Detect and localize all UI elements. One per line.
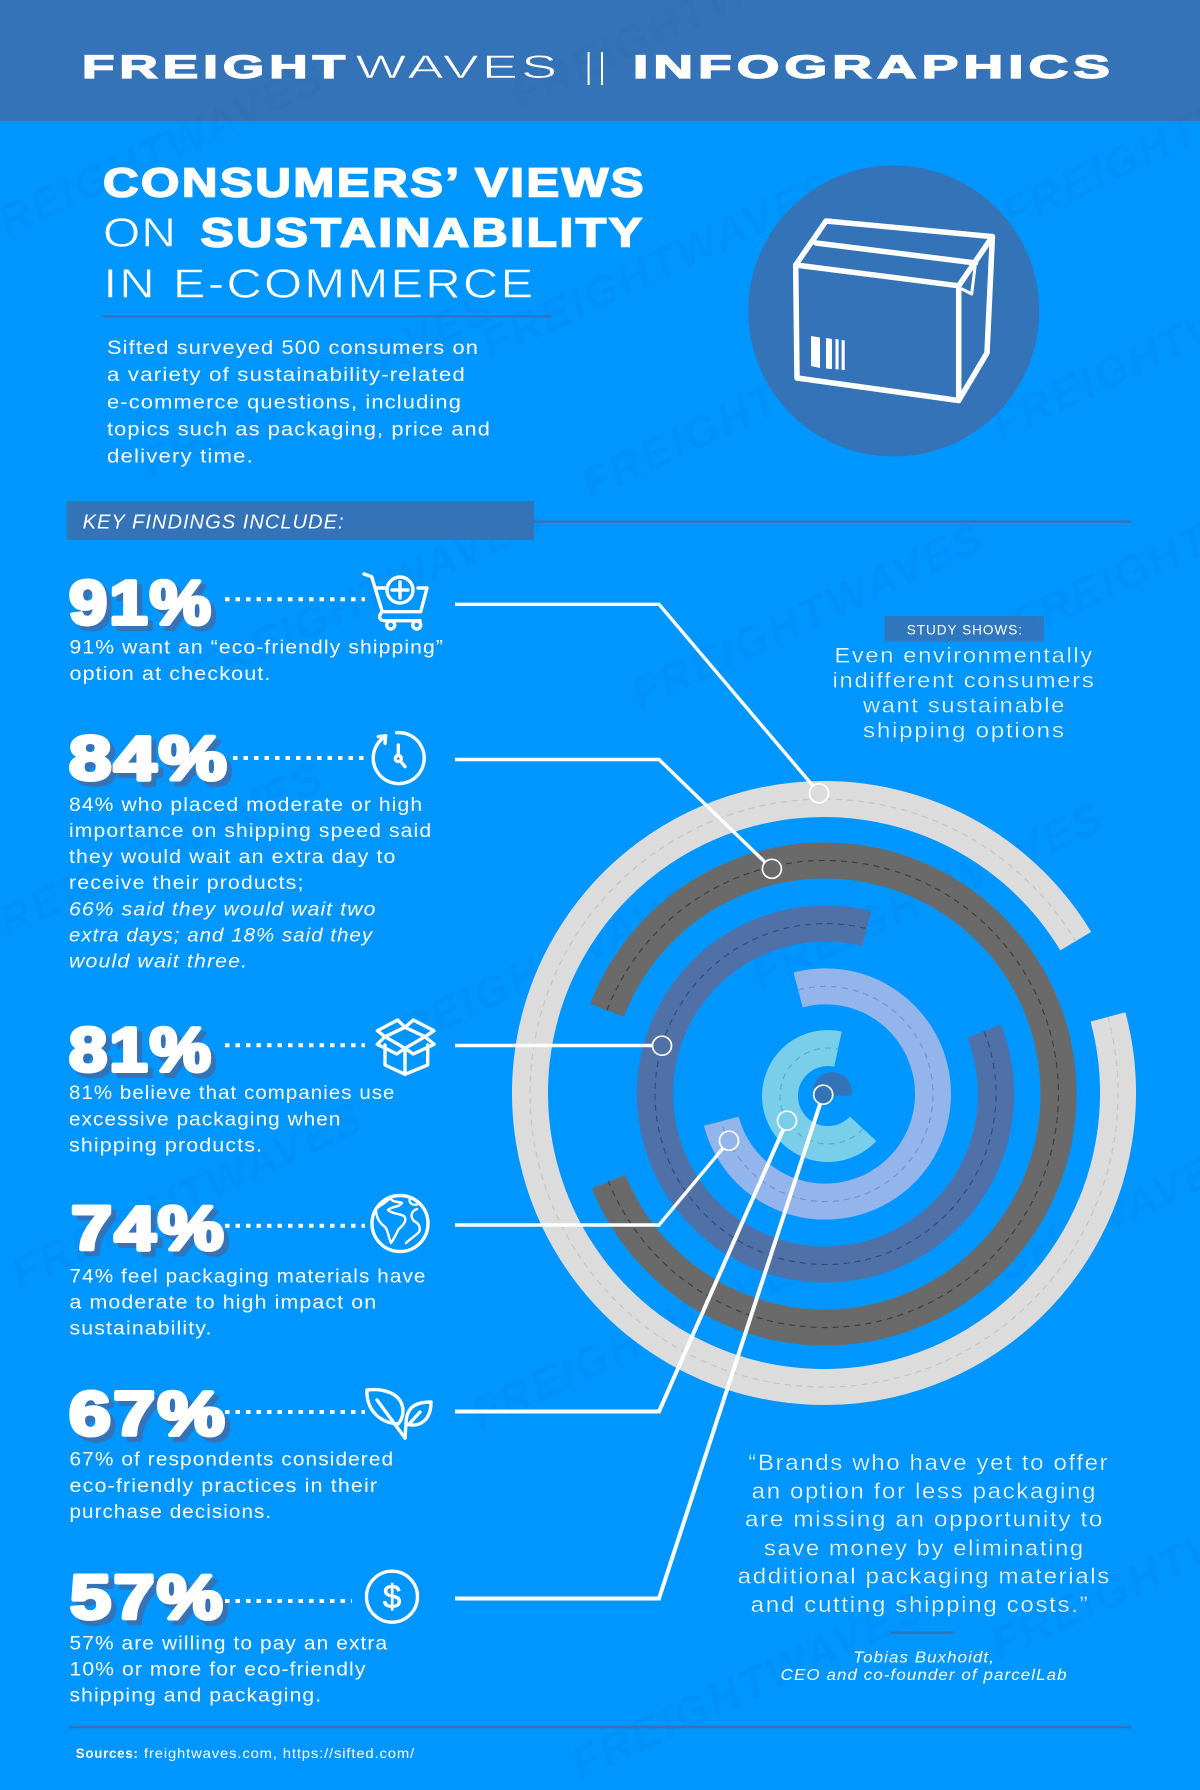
main heading: [103, 160, 646, 306]
description: 67% of respondents considered: [70, 1450, 394, 1471]
number: 74%: [71, 1195, 226, 1264]
sources: freightwaves.com, https://sifted.com/: [144, 1745, 415, 1761]
callout: quote: additional packaging materials: [738, 1563, 1111, 1588]
icon: dollar coin: $: [383, 1578, 401, 1615]
dotted connector: [225, 1043, 365, 1047]
sources: Sources:: [76, 1745, 139, 1761]
ring: 57% center wedge: [813, 1072, 852, 1096]
intro text: topics such as packaging, price and: [107, 420, 491, 441]
callout: study shows: Even environmentally: [834, 644, 1094, 667]
main heading: IN E-COMMERCE: [104, 260, 536, 306]
callout: quote: save money by eliminating: [764, 1535, 1085, 1560]
header title: WAVES: [356, 49, 560, 85]
background watermarks: FREIGHTWAVES: [564, 1582, 933, 1789]
description: [70, 1633, 388, 1706]
dotted connector: [225, 597, 365, 601]
callout: quote: Tobias Buxhoidt,: [853, 1649, 995, 1666]
description: 74% feel packaging materials have: [70, 1267, 426, 1288]
intro text: Sifted surveyed 500 consumers on: [107, 338, 479, 359]
header title: FREIGHT: [82, 49, 350, 85]
stat: 74%: [70, 1195, 428, 1340]
number: 84%: [69, 725, 229, 794]
description: 81% believe that companies use: [69, 1083, 396, 1104]
dotted connector: [225, 1410, 365, 1414]
description: receive their products;: [69, 873, 304, 894]
stat: 67%: [69, 1380, 431, 1523]
description: eco-friendly practices in their: [70, 1476, 378, 1497]
intro text: a variety of sustainability-related: [107, 365, 466, 386]
background watermarks: FREIGHTWAVES: [464, 1232, 833, 1439]
icon: leaves: [367, 1390, 431, 1438]
dotted connector: [225, 1599, 352, 1603]
description: [69, 795, 432, 973]
description: shipping products.: [69, 1135, 263, 1156]
key findings label: KEY FINDINGS INCLUDE:: [83, 512, 345, 534]
description: 66% said they would wait two: [69, 899, 376, 920]
callout: quote: “Brands who have yet to offer: [748, 1450, 1109, 1475]
icon: dollar coin: [366, 1571, 418, 1622]
header title: [82, 49, 1115, 85]
description: 84% who placed moderate or high: [69, 795, 423, 816]
description: [69, 1083, 396, 1156]
intro text: e-commerce questions, including: [107, 392, 462, 413]
description: [70, 638, 444, 685]
callout: quote: an option for less packaging: [752, 1478, 1097, 1503]
main heading: CONSUMERS’ VIEWS: [103, 160, 646, 206]
ring: 74%: [694, 963, 957, 1225]
description: [70, 1450, 394, 1523]
description: option at checkout.: [70, 664, 272, 685]
callout: study shows: [832, 616, 1096, 742]
dotted connector: [233, 756, 365, 760]
bottom rule: [69, 1726, 1132, 1728]
heading rule: [102, 315, 551, 318]
radial ring chart: [464, 733, 1184, 1453]
ring: 91%: [464, 733, 1184, 1453]
icon: clock: [373, 733, 424, 784]
dotted connector: [225, 1224, 365, 1228]
background watermarks: FREIGHTWAVES: [184, 492, 553, 699]
icon: shopping cart: [364, 574, 427, 629]
ring: 84%: [523, 792, 1127, 1396]
description: shipping and packaging.: [70, 1685, 322, 1706]
description: excessive packaging when: [69, 1109, 342, 1130]
description: 91% want an “eco-friendly shipping”: [70, 638, 444, 659]
number: 81%: [69, 1016, 213, 1085]
description: a moderate to high impact on: [70, 1293, 377, 1314]
number: 57%: [70, 1564, 225, 1633]
description: 57% are willing to pay an extra: [70, 1633, 388, 1654]
callout: quote: and cutting shipping costs.”: [751, 1592, 1089, 1617]
background watermarks: FREIGHTWAVES: [474, 162, 843, 369]
description: they would wait an extra day to: [69, 847, 396, 868]
description: purchase decisions.: [70, 1502, 272, 1523]
icon: package in circle: [748, 166, 1039, 456]
number: 91%: [69, 569, 213, 638]
ring: 67%: [760, 1028, 896, 1164]
ring: 81%: [604, 873, 1047, 1315]
callout: quote: CEO and co-founder of parcelLab: [781, 1667, 1068, 1684]
description: [70, 1267, 426, 1340]
key findings label: [67, 501, 1131, 540]
background watermarks: FREIGHTWAVES: [4, 1092, 373, 1299]
callout: quote: are missing an opportunity to: [745, 1507, 1104, 1532]
description: 10% or more for eco-friendly: [70, 1659, 366, 1680]
header band: [0, 0, 1200, 121]
description: would wait three.: [69, 952, 248, 973]
description: extra days; and 18% said they: [69, 926, 374, 947]
callout: study shows: want sustainable: [862, 694, 1066, 717]
background watermarks: FREIGHTWAVES: [624, 512, 993, 719]
callout: study shows: STUDY SHOWS:: [907, 621, 1023, 637]
callout: study shows: indifferent consumers: [832, 669, 1096, 692]
intro text: [107, 338, 491, 468]
stat: 91%: [69, 569, 444, 685]
background watermarks: FREIGHTWAVES: [574, 302, 943, 509]
icon: globe: [372, 1196, 428, 1252]
description: importance on shipping speed said: [69, 821, 432, 842]
main heading: ON: [103, 210, 177, 256]
callout: study shows: shipping options: [863, 719, 1066, 742]
icon: open box: [377, 1020, 434, 1074]
callout: quote: [738, 1450, 1111, 1684]
description: sustainability.: [70, 1319, 212, 1340]
number: 67%: [69, 1380, 227, 1449]
main heading: SUSTAINABILITY: [200, 210, 644, 256]
leader lines: [455, 604, 823, 1598]
ring markers: [652, 784, 833, 1150]
intro text: delivery time.: [107, 446, 254, 468]
stat: 84%: [69, 725, 432, 973]
header title: INFOGRAPHICS: [633, 49, 1115, 85]
stat: 57%: [70, 1564, 418, 1706]
background watermarks: FREIGHTWAVES: [744, 792, 1113, 999]
background watermarks: FREIGHTWAVES: [134, 282, 503, 489]
stat: 81%: [69, 1016, 434, 1156]
background watermarks: FREIGHTWAVES: [364, 862, 733, 1069]
